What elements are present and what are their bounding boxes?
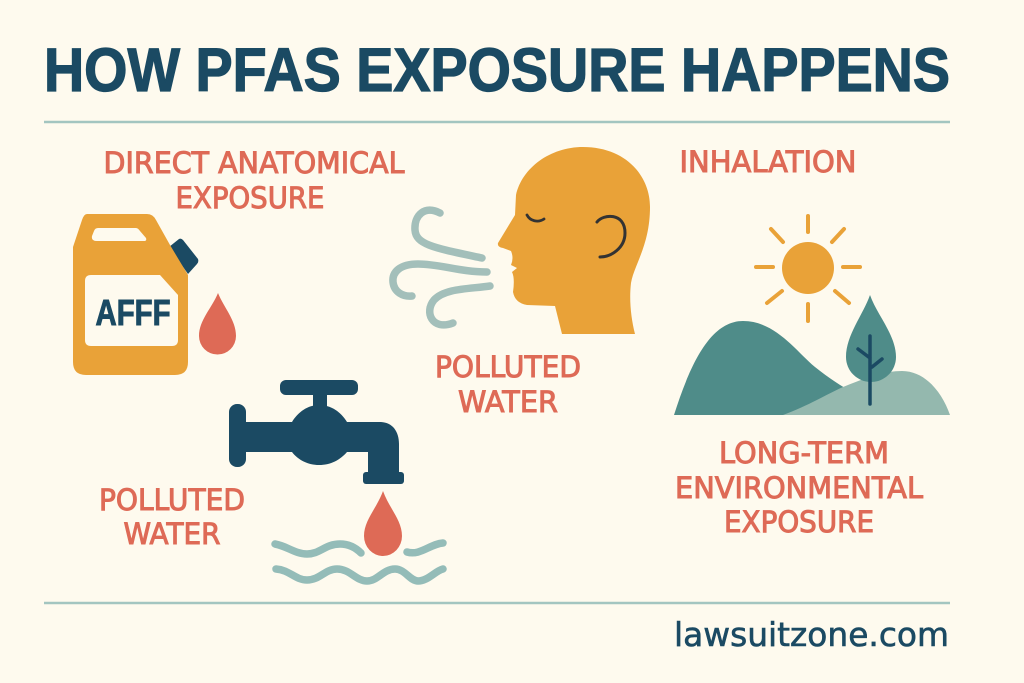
heading: inhalation: INHALATION [680,145,856,179]
heading: long-term environmental exposure [675,436,923,539]
icon: AFFF jug: AFFF [96,292,170,333]
icon: AFFF jug [73,214,198,375]
icon: water waves [275,543,443,581]
icon: head profile [498,147,650,334]
heading: direct anatomical exposure: EXPOSURE [176,181,324,215]
heading: direct anatomical exposure [104,146,404,215]
heading: long-term environmental exposure: LONG-TERM [719,436,889,470]
heading: polluted water left: POLLUTED [99,483,245,517]
heading: long-term environmental exposure: ENVIRONMENTAL [675,471,923,505]
heading: direct anatomical exposure: DIRECT ANATOMICAL [104,146,404,180]
website credit: lawsuitzone.com [674,615,949,654]
icon: tap water drop [364,491,402,556]
icon: air swirls [393,210,490,325]
heading: polluted water center: WATER [458,385,558,419]
title: HOW PFAS EXPOSURE HAPPENS [44,36,950,104]
heading: polluted water left: WATER [124,517,220,551]
icon: red drop [199,293,236,354]
heading: long-term environmental exposure: EXPOSURE [724,505,874,539]
icon: water tap [229,380,404,484]
heading: polluted water center [435,350,581,419]
icon: hills and tree [674,295,950,415]
heading: polluted water left [99,483,245,551]
icon: sun [756,216,860,321]
heading: polluted water center: POLLUTED [435,350,581,384]
